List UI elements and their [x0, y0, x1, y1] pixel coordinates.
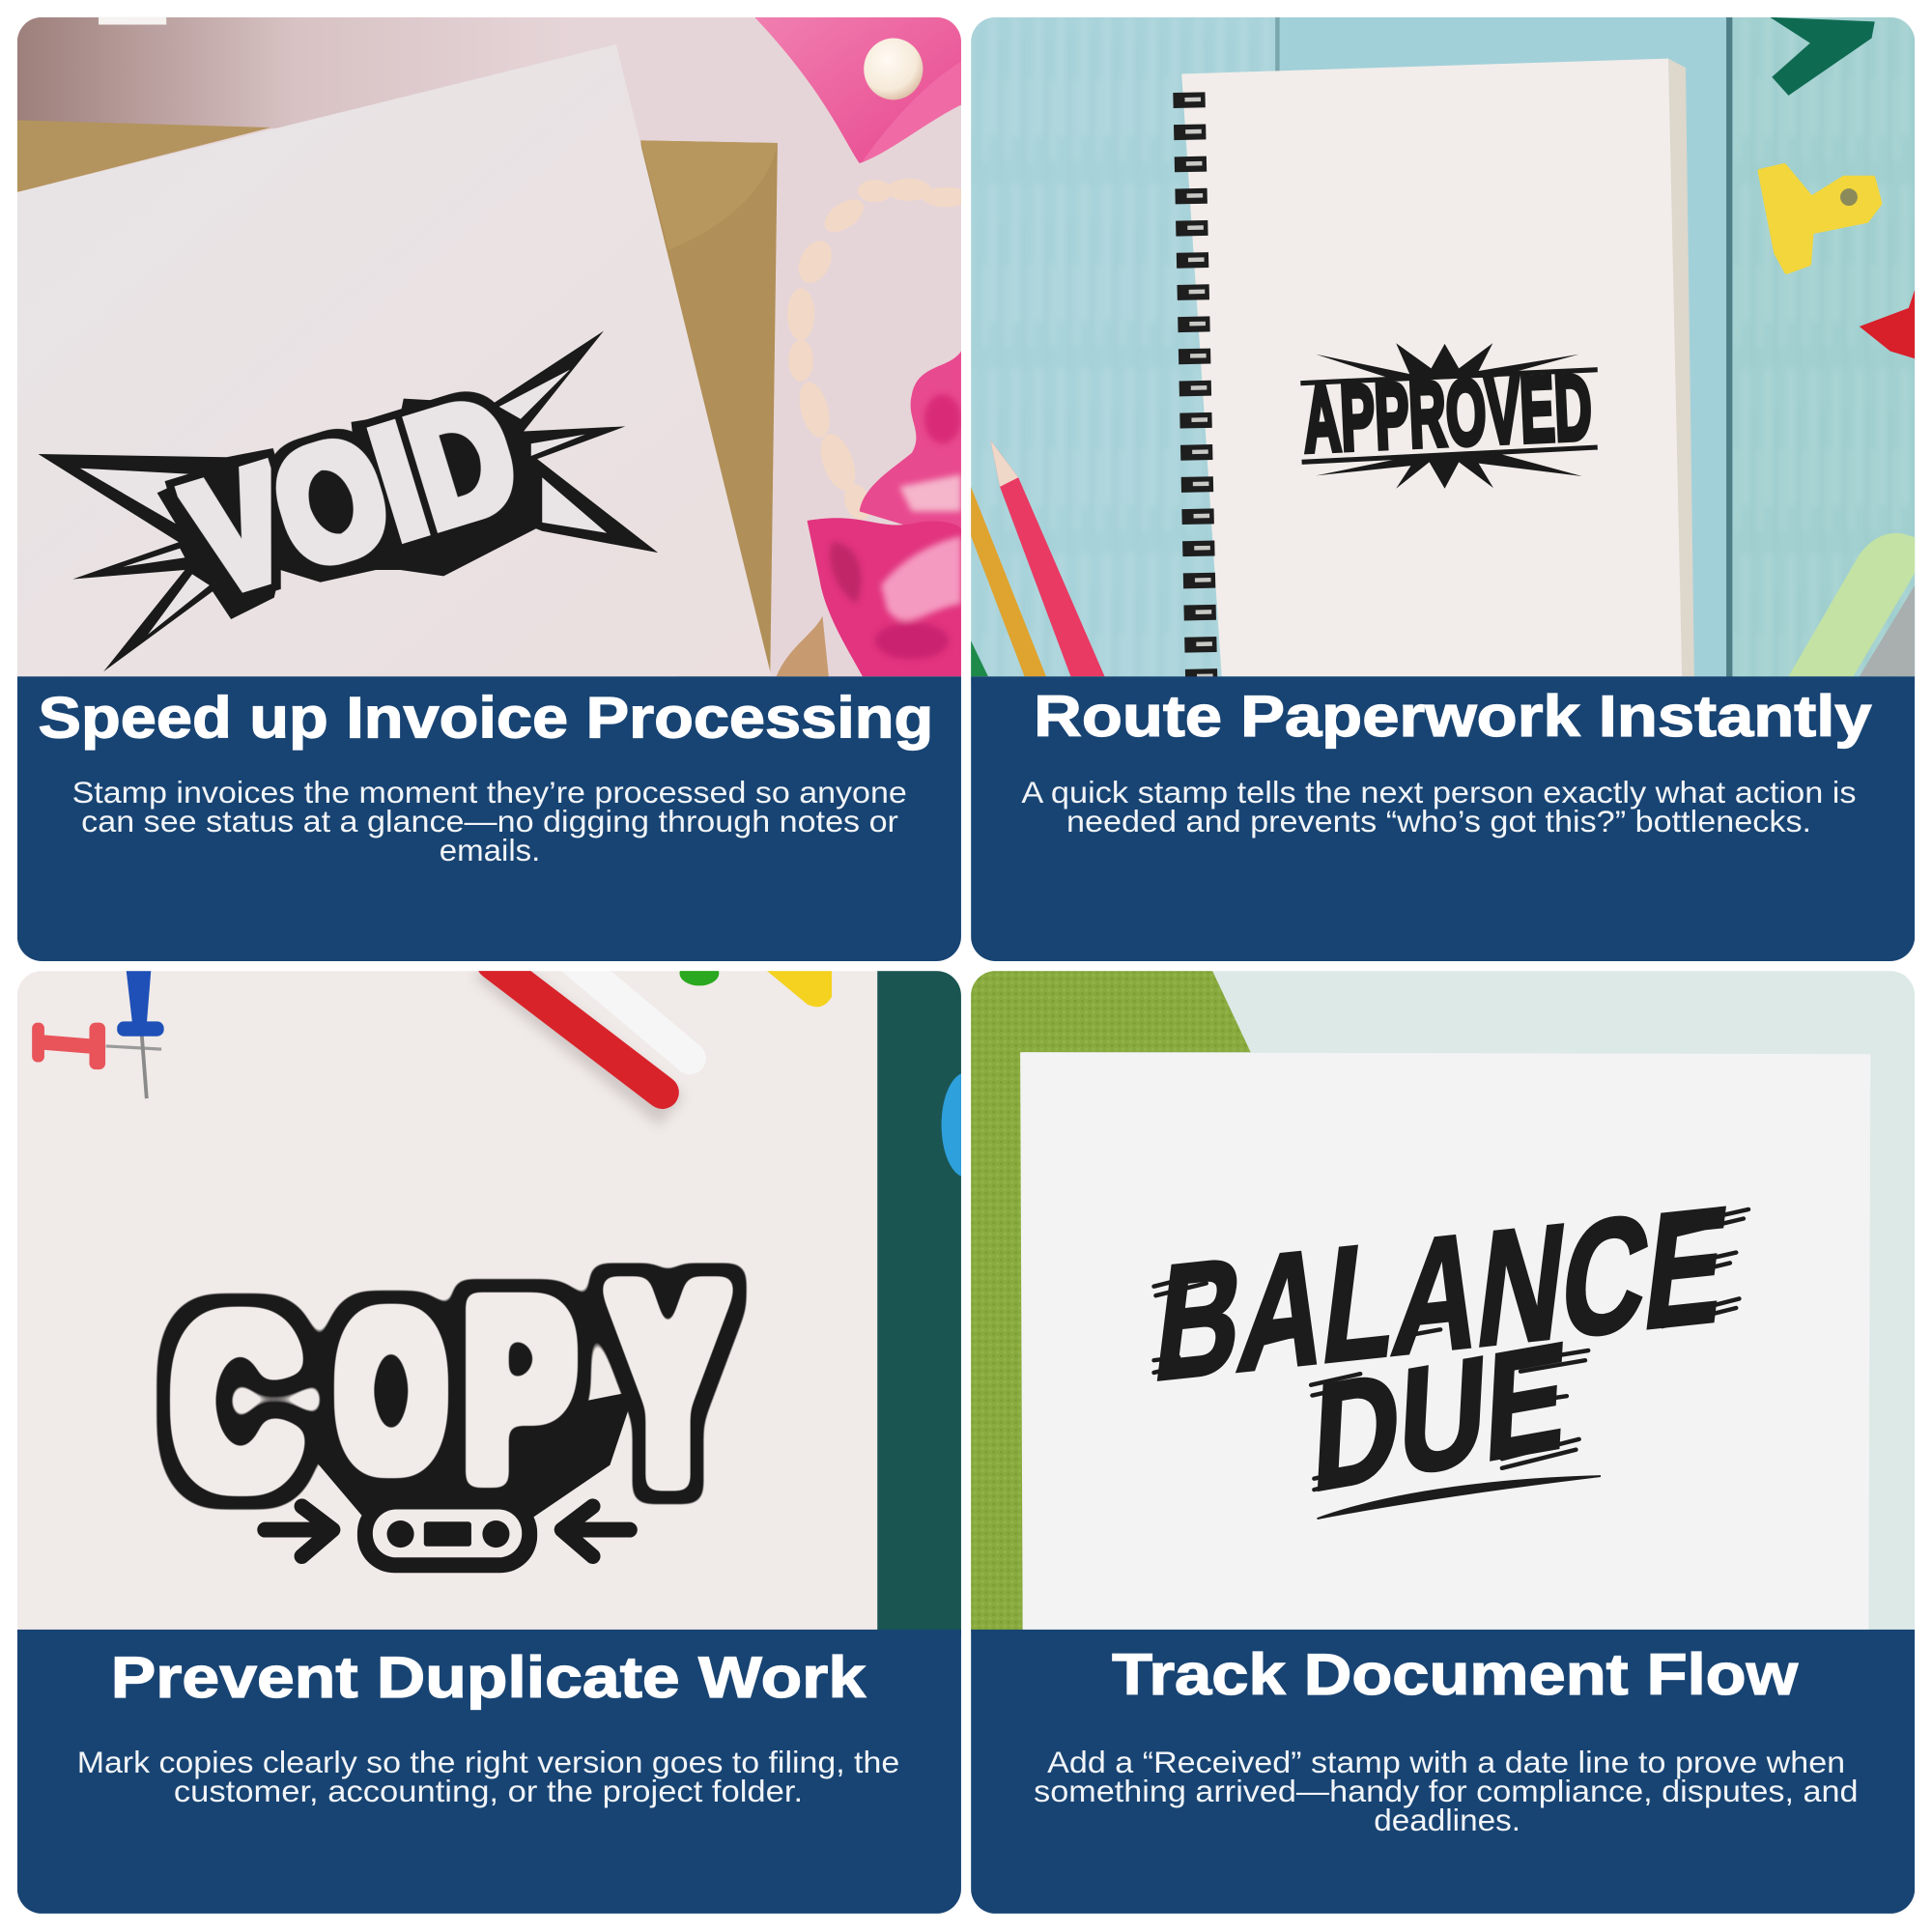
stamp: COPY: P: [465, 1247, 574, 1533]
body text: [1021, 776, 1857, 838]
body text: deadlines.: [1374, 1804, 1520, 1837]
heading: Speed up Invoice Processing: [39, 685, 933, 750]
stamp: COPY: O: [338, 1268, 444, 1513]
caption block: [17, 1630, 961, 1919]
caption block: [971, 1630, 1915, 1919]
photo: white paper on green and mint: [971, 971, 1915, 1636]
body text: Stamp invoices the moment they’re processed so anyone: [72, 776, 907, 810]
heading: Route Paperwork Instantly: [1034, 684, 1872, 749]
body text: A quick stamp tells the next person exactly what action is: [1021, 776, 1857, 810]
stamp: APPROVED: APPROVED: [1301, 355, 1594, 471]
body text: needed and prevents “who’s got this?” bottlenecks.: [1066, 805, 1811, 838]
panel: prevent duplicate work: [17, 960, 991, 1919]
body text: Mark copies clearly so the right version goes to filing, the: [77, 1746, 899, 1779]
stamp: COPY: Y: [610, 1225, 726, 1542]
panel: speed up invoice processing: [17, 17, 969, 966]
stamp: BALANCE DUE: DUE: [1309, 1310, 1570, 1523]
body text: customer, accounting, or the project folder.: [174, 1775, 803, 1808]
photo: paper on envelope with flowers: [17, 17, 969, 683]
body text: [73, 781, 906, 862]
body text: Add a “Received” stamp with a date line to prove when: [1047, 1746, 1845, 1779]
panel: track document flow: [971, 971, 1915, 1919]
heading: Prevent Duplicate Work: [111, 1645, 867, 1710]
panel: route paperwork instantly: [971, 17, 1915, 966]
caption block: [17, 676, 961, 966]
photo: paper with pins and markers: [17, 960, 991, 1636]
stamp: BALANCE DUE: [1147, 1172, 1748, 1523]
body text: can see status at a glance—no digging through notes or: [81, 805, 898, 838]
stamp: COPY: [173, 1225, 726, 1573]
stamp: VOID: VOID: [170, 362, 535, 630]
heading: Track Document Flow: [1112, 1642, 1798, 1707]
stamp: BALANCE DUE: BALANCE: [1147, 1172, 1736, 1415]
stamp: VOID: [39, 330, 658, 671]
body text: emails.: [440, 834, 540, 867]
stamp: APPROVED: [1300, 343, 1598, 489]
caption block: [971, 676, 1915, 966]
body text: something arrived—handy for compliance, disputes, and: [1034, 1775, 1859, 1808]
stamp: COPY: C: [173, 1266, 300, 1535]
body text: [1034, 1746, 1859, 1837]
body text: [77, 1746, 899, 1808]
photo: notebook on blue wood: [971, 17, 1915, 683]
